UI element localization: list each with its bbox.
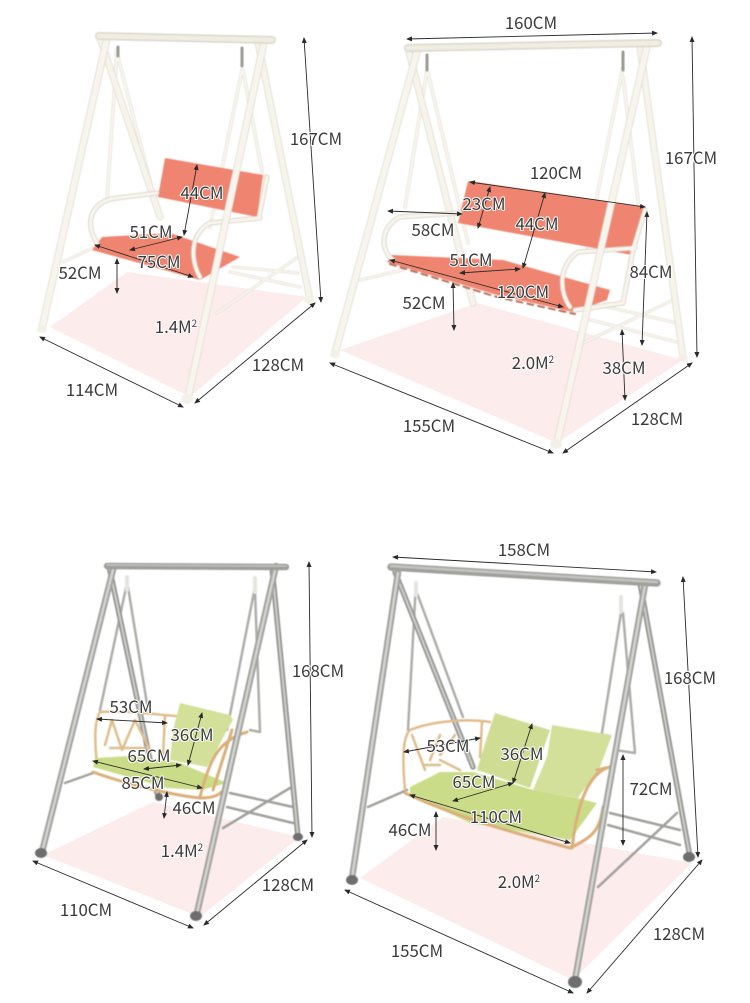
labels A: 114CM [66,377,118,401]
labels C: 2 [198,839,204,854]
labels B: 23CM [463,191,505,215]
pillow [170,703,233,767]
labels C: 168CM [292,658,344,682]
labels D: 46CM [389,817,431,841]
floor area B [340,303,683,443]
labels A: 52CM [59,260,101,284]
labels C: 53CM [110,694,152,718]
labels C: 110CM [60,897,112,921]
labels B: 128CM [631,406,683,430]
labels B: 51CM [450,247,492,271]
labels D: 168CM [664,665,716,689]
labels B: 160CM [505,10,557,34]
seat cushion [92,233,240,280]
labels A [59,126,342,401]
labels B: 58CM [412,217,454,241]
left pillow [477,713,550,788]
labels B [403,10,717,437]
labels B: 155CM [403,413,455,437]
labels B: 44CM [516,211,558,235]
labels D: 36CM [501,741,543,765]
labels D: 2 [535,870,541,885]
backrest cushion [458,181,645,255]
labels A: 75CM [138,249,180,273]
labels B: 2.0M [512,350,549,374]
labels D: 158CM [498,537,550,561]
labels D: 128CM [653,921,705,945]
swing C: single grey frame with rattan seat [33,562,344,928]
labels A: 51CM [130,219,172,243]
labels C: 36CM [171,722,213,746]
labels B: 2 [549,351,555,366]
seat cushion [387,255,610,312]
floor area D [360,817,692,980]
swing D: double grey frame with rattan bench [345,537,716,993]
dimension arrows B [330,33,697,453]
swing A: single white frame with coral seat [37,36,342,407]
foot caps [37,325,47,333]
labels D [389,537,716,962]
labels D: 53CM [427,733,469,757]
labels D: 2.0M [498,869,535,893]
floor area C [43,802,300,917]
rattan back frame [403,720,490,790]
labels C: 1.4M [161,838,198,862]
drawing A [37,36,314,404]
labels A: 44CM [181,180,223,204]
dimension arrows C [33,562,312,928]
labels C: 65CM [128,743,170,767]
labels B: 38CM [603,355,645,379]
feet [346,875,358,885]
swing B: double white frame with coral bench [330,10,717,453]
feet [35,848,47,858]
labels C: 128CM [262,872,314,896]
right pillow [533,725,612,798]
labels D: 72CM [630,776,672,800]
labels B: 120CM [497,279,549,303]
labels B: 84CM [630,259,672,283]
labels B: 52CM [403,290,445,314]
drawing D [346,566,695,988]
rattan base and arm [405,767,610,848]
foot caps [330,350,340,358]
backrest cushion [158,158,263,217]
dimension arrows D [345,557,702,993]
labels A: 1.4M [155,314,192,338]
labels D: 110CM [470,804,522,828]
labels A: 167CM [290,126,342,150]
labels D: 65CM [453,769,495,793]
seat cushion [93,756,227,790]
labels D: 155CM [391,938,443,962]
labels C: 85CM [122,770,164,794]
drawing B [330,43,688,449]
labels A: 2 [192,315,198,330]
labels B: 120CM [530,160,582,184]
labels C: 46CM [173,795,215,819]
seat cushion [410,772,597,840]
dimension arrows A [40,38,321,407]
rattan base and arm [93,730,247,798]
floor area A [50,272,307,397]
rattan back frame [95,711,176,765]
drawing C [35,565,303,921]
labels C [60,658,344,921]
labels B: 167CM [665,145,717,169]
labels A: 128CM [252,352,304,376]
